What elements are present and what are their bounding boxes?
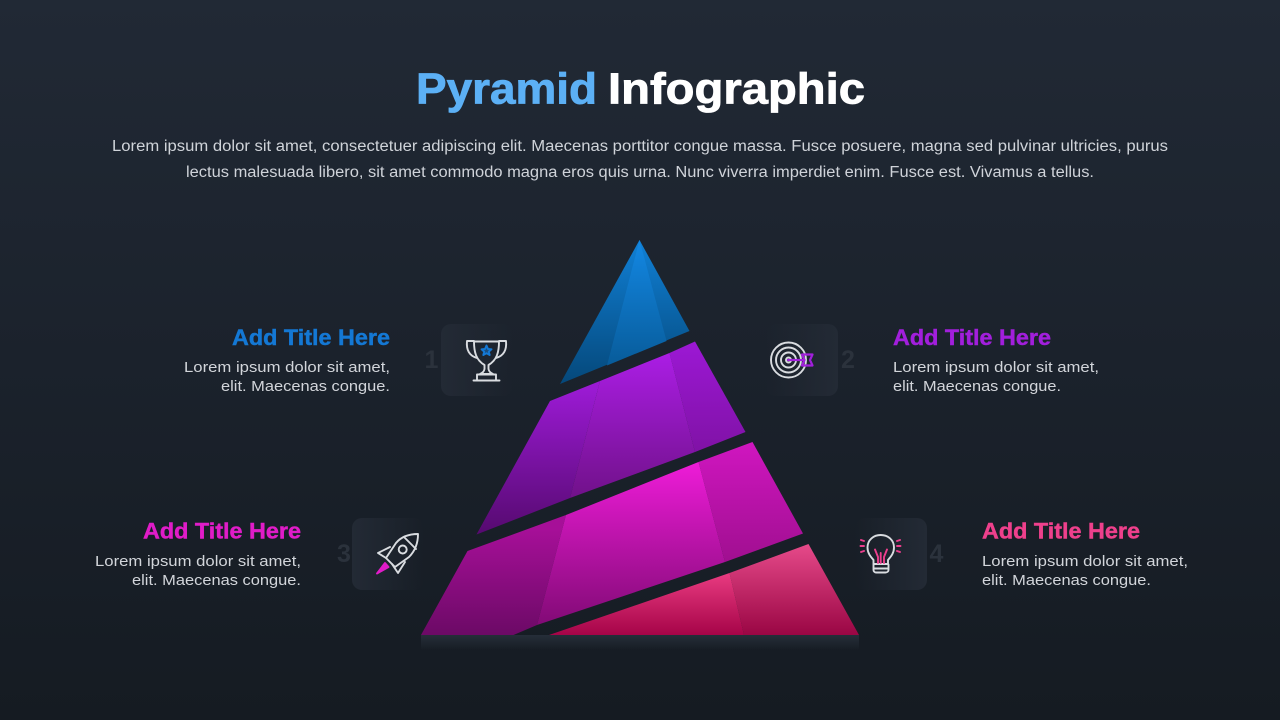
icon: target [771,342,812,378]
step 2 [766,324,1099,396]
number 1: 1 [425,346,439,374]
step 4 [855,518,1188,590]
title: Infographic [608,64,865,114]
number 4: 4 [930,540,944,568]
pyramid tier 1: blue [560,240,690,384]
pyramid tier 4: pink [549,544,859,635]
heading 3: Add Title Here [143,518,301,544]
pyramid tier 3: magenta [421,442,803,635]
card 2 [766,324,838,396]
body 2: elit. Maecenas congue. [893,378,1061,395]
title: Pyramid [416,64,597,114]
icon: rocket [377,534,418,574]
intro text: Lorem ipsum dolor sit amet, consectetuer adipiscing elit. Maecenas porttitor congue massa. Fusce posuere, magna sed pulvinar ultricies, purus [112,138,1168,155]
heading 1: Add Title Here [232,325,390,350]
body 4: Lorem ipsum dolor sit amet, [982,553,1188,570]
body 3: elit. Maecenas congue. [132,572,301,589]
body 1: elit. Maecenas congue. [221,378,390,395]
pyramid [421,240,859,650]
number 3: 3 [337,540,351,568]
step 3 [95,518,424,590]
card 4 [855,518,927,590]
number 2: 2 [841,346,855,374]
intro text [112,138,1168,181]
icon: light bulb [860,535,900,572]
body 4 [982,553,1188,589]
title [416,64,865,114]
body 4: elit. Maecenas congue. [982,572,1151,589]
step 1 [184,324,513,396]
body 2 [893,359,1099,395]
body 3: Lorem ipsum dolor sit amet, [95,553,301,570]
pyramid tier 2: purple [476,342,746,534]
heading 2: Add Title Here [893,325,1051,350]
icon: trophy [467,341,506,380]
pyramid base shadow [421,635,859,650]
body 1: Lorem ipsum dolor sit amet, [184,359,390,376]
intro text: lectus malesuada libero, sit amet commodo magna eros quis urna. Nunc viverra imperdiet enim. Fusce est. Vivamus a tellus. [186,164,1094,181]
body 3 [95,553,301,589]
card 3 [352,518,424,590]
body 2: Lorem ipsum dolor sit amet, [893,359,1099,376]
heading 4: Add Title Here [982,518,1140,544]
body 1 [184,359,390,395]
card 1 [441,324,513,396]
